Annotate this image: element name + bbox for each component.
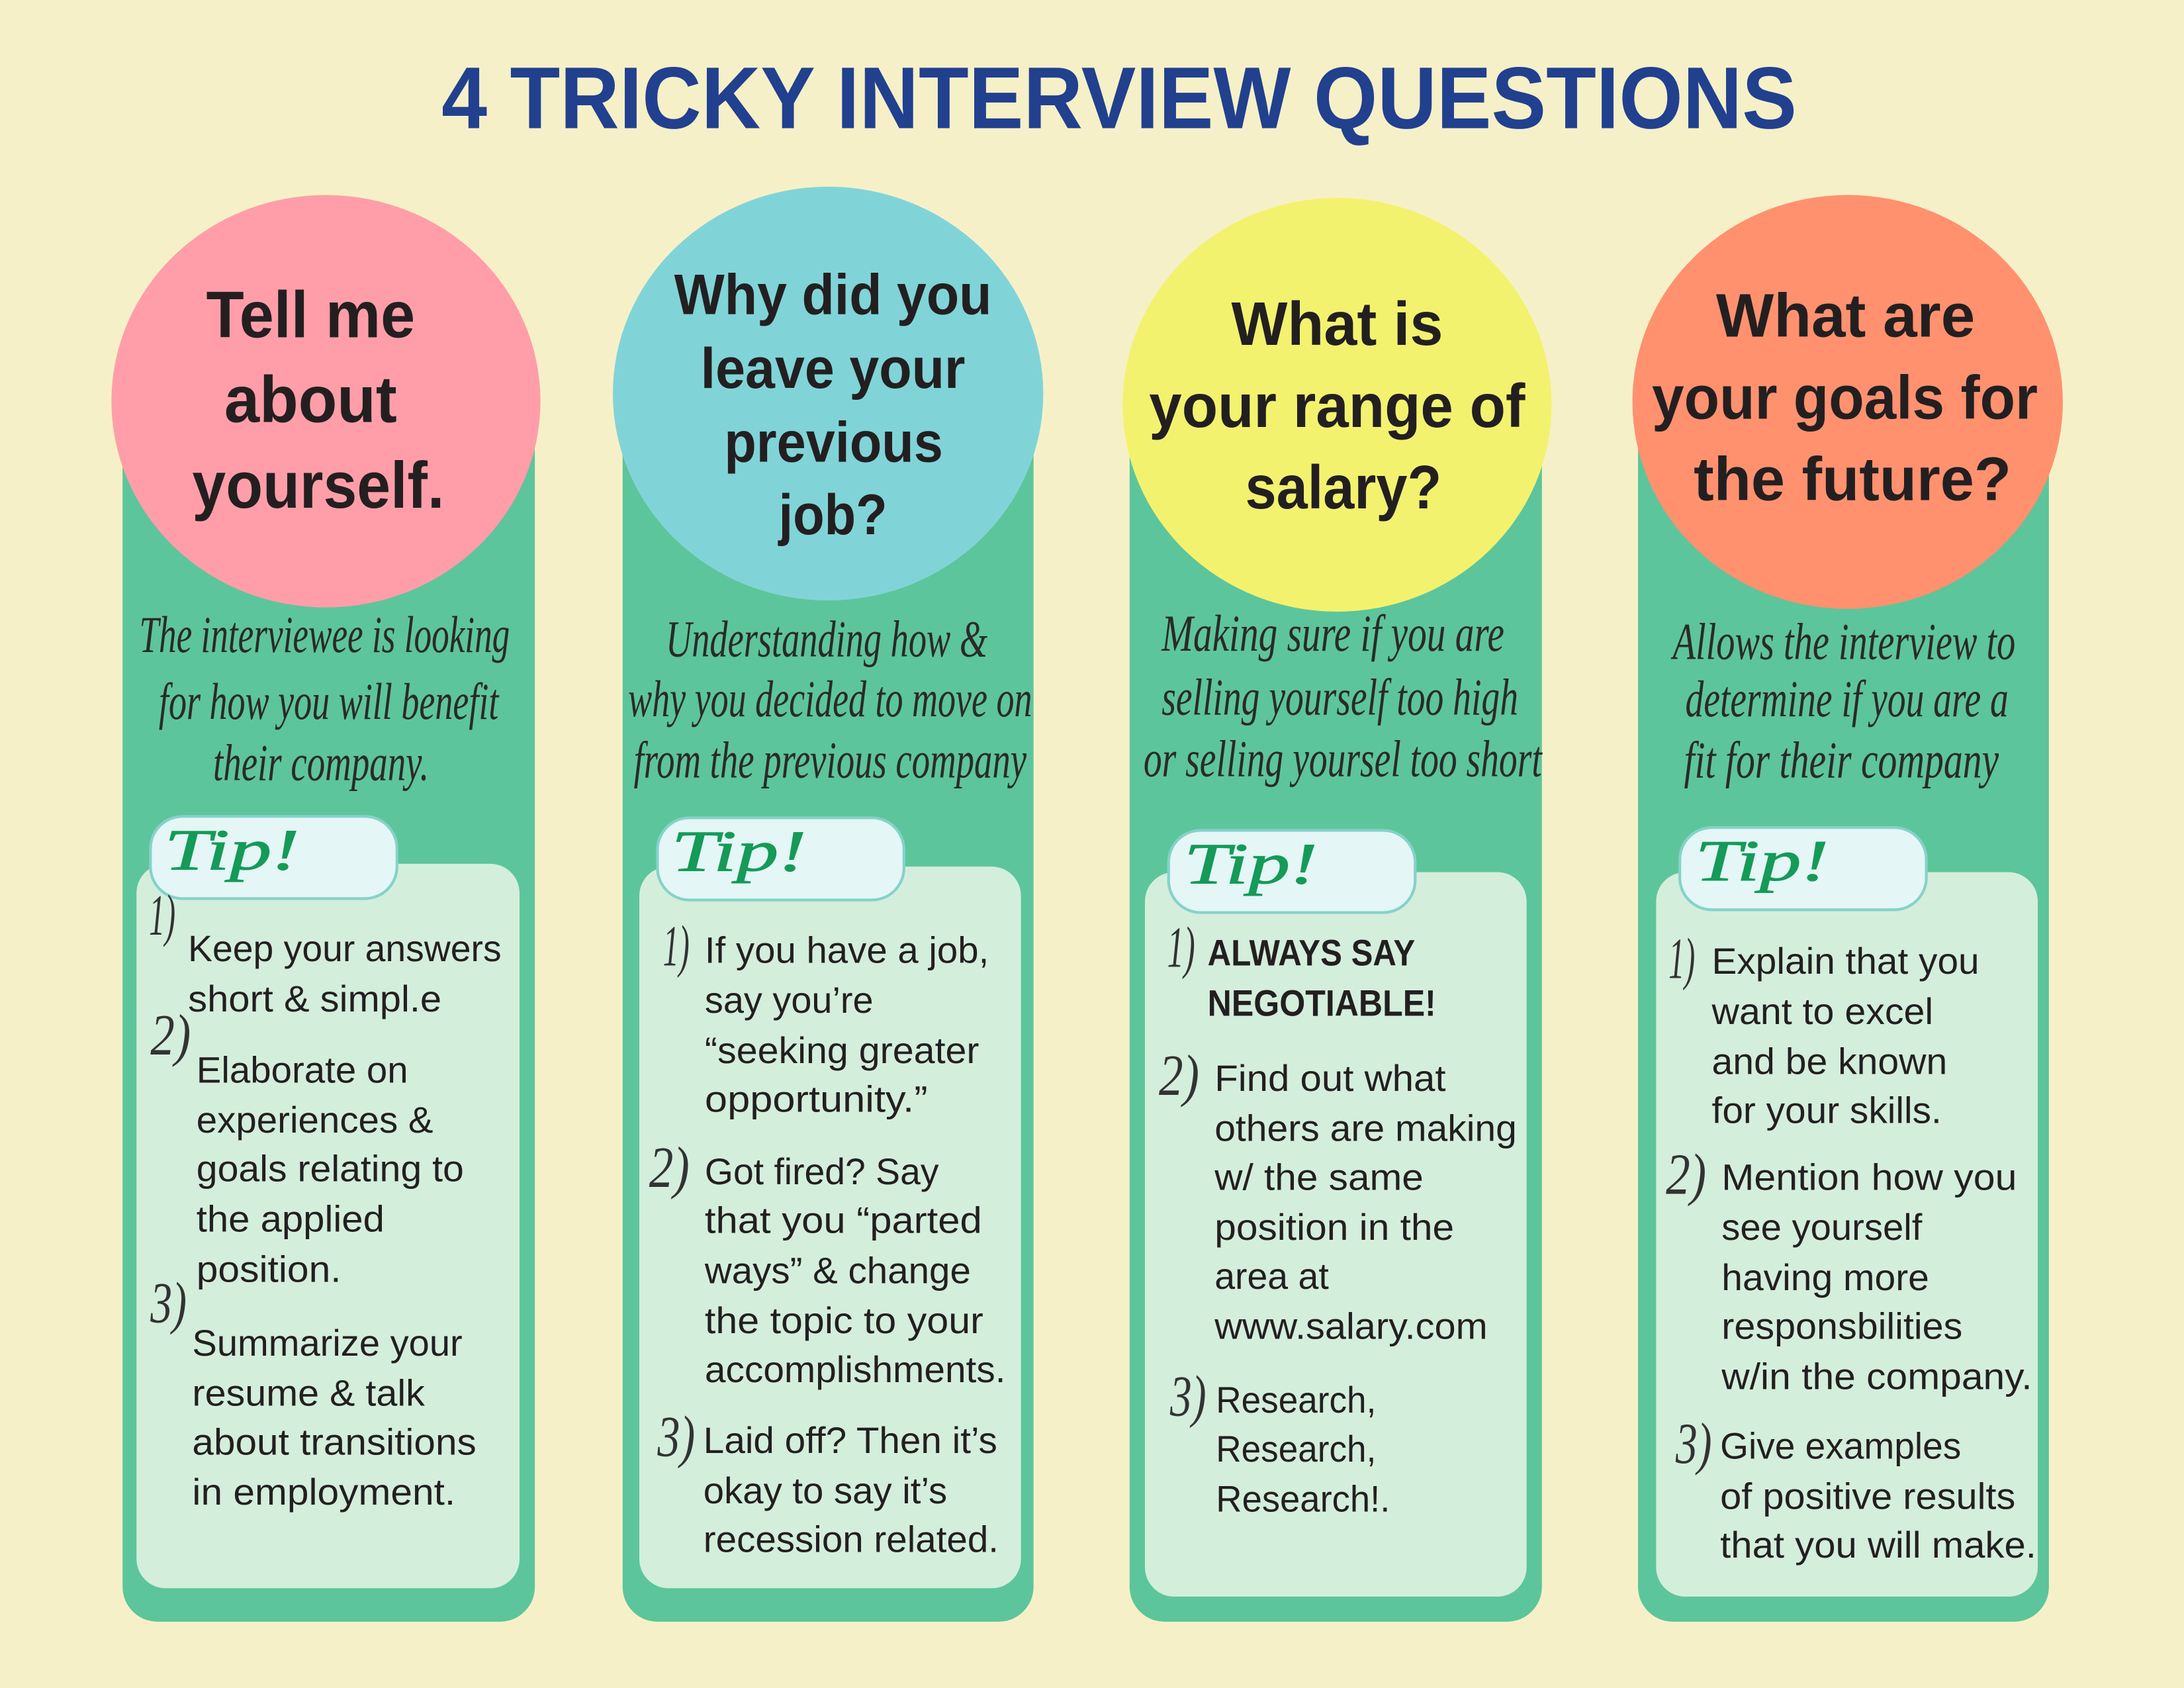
tip list 3: www.salary.com: [1214, 1306, 1488, 1347]
panel: why did you leave your previous job: [613, 187, 1043, 1622]
tip tab 3: [1169, 830, 1415, 913]
tip tab 3: Tip!: [1184, 831, 1318, 896]
tip list 3: [1159, 915, 1517, 1520]
tips box 4: [1656, 872, 2038, 1597]
panel 3 background: [1130, 418, 1542, 1622]
handwritten explanation 2: [628, 610, 1032, 788]
tip list 2: 3): [657, 1404, 695, 1469]
tip list 3: Research,: [1216, 1380, 1376, 1421]
tip list 3: ALWAYS SAY: [1208, 933, 1415, 974]
tip list 4: Mention how you: [1721, 1156, 2017, 1197]
tip list 1: 1): [149, 883, 175, 948]
tip list 1: Summarize your: [192, 1323, 463, 1364]
tip list 4: Explain that you: [1712, 941, 1979, 982]
tip list 1: Keep your answers: [188, 928, 502, 969]
panel 2 background: [623, 418, 1034, 1622]
circle: question 3: salary?: [1246, 453, 1441, 522]
tip list 1: Elaborate on: [197, 1049, 408, 1090]
tip list 2: Got fired? Say: [705, 1151, 939, 1192]
handwritten explanation 4: determine if you are a: [1686, 671, 2009, 727]
tip list 2: 1): [663, 914, 690, 979]
handwritten explanation 4: Allows the interview to: [1670, 614, 2015, 671]
tip list 4: responsbilities: [1721, 1306, 1962, 1347]
panel: what are your goals for the future: [1633, 195, 2063, 1622]
tip list 2: 2): [649, 1135, 690, 1200]
tip list 3: 1): [1167, 915, 1195, 980]
tip list 2: the topic to your: [705, 1300, 983, 1341]
tip list 1: resume & talk: [192, 1373, 425, 1414]
circle: question 2: job?: [778, 483, 887, 547]
panel 1 background: [122, 418, 535, 1622]
circle: question 3: [1122, 198, 1552, 612]
tip list 4: that you will make.: [1720, 1524, 2036, 1566]
handwritten explanation 3: selling yourself too high: [1161, 669, 1518, 726]
tip list 4: Give examples: [1720, 1426, 1961, 1467]
tip list 4: 3): [1675, 1411, 1712, 1476]
tip list 4: see yourself: [1721, 1207, 1923, 1248]
handwritten explanation 4: fit for their company: [1684, 731, 1999, 788]
tip list 1: 2): [150, 1003, 191, 1068]
tip list 2: If you have a job,: [705, 929, 989, 970]
tip list 1: in employment.: [192, 1472, 455, 1513]
tip list 4: of positive results: [1720, 1476, 2015, 1517]
tip list 2: [649, 914, 1006, 1560]
tip list 3: w/ the same: [1214, 1156, 1424, 1197]
tip tab 4: [1680, 827, 1927, 910]
tip list 3: area at: [1214, 1256, 1329, 1297]
tip list 1: experiences &: [197, 1100, 433, 1141]
handwritten explanation 3: [1144, 605, 1543, 787]
circle: question 3: What is: [1231, 289, 1443, 358]
tip list 2: opportunity.”: [705, 1079, 928, 1120]
tip list 1: 3): [150, 1270, 187, 1335]
tip list 2: that you “parted: [705, 1200, 982, 1241]
tip tab 2: Tip!: [671, 819, 807, 884]
tip list 2: recession related.: [704, 1519, 999, 1560]
circle: question 1: [111, 195, 541, 608]
circle: question 2: leave your: [701, 337, 965, 400]
tip list 3: position in the: [1214, 1207, 1454, 1248]
handwritten explanation 2: why you decided to move on: [628, 671, 1032, 727]
tip list 3: Research,: [1216, 1429, 1376, 1470]
tip list 3: Find out what: [1214, 1058, 1446, 1099]
tip tab 2: [657, 818, 904, 900]
panel 4 background: [1638, 418, 2049, 1622]
circle: question 1: Tell me: [206, 277, 415, 351]
tip list 2: “seeking greater: [705, 1030, 979, 1071]
handwritten explanation 3: or selling yoursel too short: [1144, 730, 1543, 787]
circle: question 1: yourself.: [192, 448, 444, 522]
handwritten explanation 2: Understanding how &: [666, 610, 987, 667]
tip list 1: position.: [197, 1248, 341, 1289]
tip list 3: NEGOTIABLE!: [1208, 982, 1436, 1023]
circle: question 2: [613, 187, 1043, 600]
handwritten explanation 1: The interviewee is looking: [139, 606, 510, 663]
tip list 1: short & simpl.e: [188, 978, 441, 1019]
tip list 2: okay to say it’s: [704, 1470, 947, 1511]
tip list 3: 2): [1159, 1043, 1199, 1108]
tips box 2: [639, 867, 1021, 1588]
tip list 2: ways” & change: [704, 1250, 971, 1291]
handwritten explanation 3: Making sure if you are: [1161, 605, 1504, 662]
title: 4 TRICKY INTERVIEW QUESTIONS: [441, 50, 1797, 148]
tips box 3: [1145, 872, 1527, 1597]
tips box 1: [136, 864, 520, 1588]
tip tab 1: [150, 816, 397, 899]
circle: question 4: [1633, 195, 2063, 609]
panel: what is your range of salary: [1122, 198, 1552, 1622]
tip list 4: having more: [1721, 1257, 1929, 1298]
handwritten explanation 1: their company.: [213, 735, 429, 792]
tip list 1: goals relating to: [197, 1149, 464, 1190]
tip list 4: 1): [1668, 926, 1695, 991]
tip list 2: say you’re: [705, 980, 874, 1021]
tip list 1: the applied: [197, 1199, 385, 1240]
tip tab 4: Tip!: [1695, 829, 1829, 894]
circle: question 2: previous: [724, 411, 943, 475]
tip list 1: about transitions: [192, 1421, 477, 1462]
tip list 3: others are making: [1214, 1108, 1517, 1149]
circle: question 1: about: [224, 363, 397, 436]
tip tab 1: Tip!: [164, 818, 299, 882]
tip list 4: want to excel: [1711, 991, 1933, 1032]
circle: question 3: your range of: [1149, 371, 1526, 440]
panel: tell me about yourself: [111, 195, 541, 1622]
handwritten explanation 1: for how you will benefit: [159, 673, 500, 730]
tip list 3: Research!.: [1216, 1479, 1390, 1520]
tip list 3: 3): [1169, 1364, 1206, 1429]
circle: question 4: What are: [1716, 281, 1975, 350]
handwritten explanation 4: [1670, 614, 2015, 788]
tip list 4: w/in the company.: [1721, 1356, 2032, 1397]
handwritten explanation 2: from the previous company: [634, 731, 1026, 788]
tip list 4: and be known: [1712, 1041, 1947, 1082]
handwritten explanation 1: [139, 606, 510, 792]
circle: question 4: the future?: [1694, 445, 2011, 514]
tip list 4: 2): [1666, 1143, 1706, 1207]
circle: question 2: Why did you: [674, 263, 991, 327]
tip list 4: [1666, 926, 2036, 1566]
tip list 2: Laid off? Then it’s: [704, 1420, 997, 1461]
tip list 4: for your skills.: [1712, 1090, 1942, 1131]
tip list 2: accomplishments.: [705, 1349, 1006, 1390]
tip list 1: [149, 883, 502, 1513]
circle: question 4: your goals for: [1652, 363, 2038, 432]
